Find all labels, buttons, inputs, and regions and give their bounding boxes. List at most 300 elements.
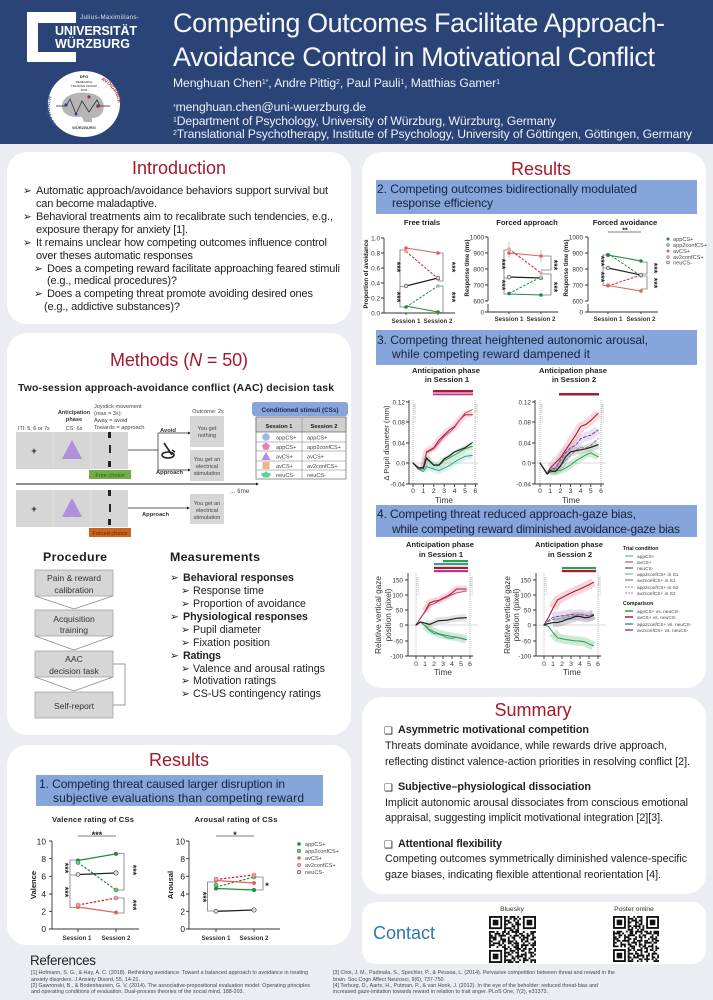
chart: free trials: *** xyxy=(392,262,402,273)
chart: valence rating: *** xyxy=(92,830,103,840)
panel: results left xyxy=(7,745,351,945)
chart: forced avoidance: 900 xyxy=(572,250,583,258)
chart: forced approach xyxy=(465,218,559,323)
introduction bullet list: (e.g., addictive substances)? xyxy=(44,301,180,313)
chart: pupil session 2: CS offset xyxy=(600,403,605,422)
authors: 1* xyxy=(262,79,269,86)
chart: free trials: Proportion of avoidance xyxy=(364,239,370,309)
introduction bullet list: ➢ xyxy=(34,288,43,300)
task timeline diagram: phase xyxy=(66,417,82,423)
task title: Two-session approach-avoidance conflict (AAC) decision task xyxy=(18,383,334,394)
chart: gaze session 2: Time xyxy=(563,668,581,677)
panel: summary xyxy=(362,697,706,894)
finding 2 banner xyxy=(376,180,697,214)
task timeline diagram: stimulation xyxy=(194,515,220,521)
legend: ratings: app2confCS+ xyxy=(305,849,339,855)
chart: gaze session 1: 0 xyxy=(414,661,418,668)
chart: arousal rating: 6 xyxy=(180,872,185,882)
chart: pupil session 1: 1 xyxy=(422,488,426,495)
chart: forced avoidance: Response time (ms) xyxy=(564,239,570,297)
authors: , Andre Pittig xyxy=(268,76,336,90)
chart: gaze session 1: 5 xyxy=(459,661,463,668)
introduction bullet list: Does a competing threat promote avoiding desired ones xyxy=(47,288,314,300)
legend: gaze trial condition and comparison: app2confCS+ in S2 xyxy=(637,585,679,591)
chart: forced avoidance xyxy=(564,218,659,323)
chart: gaze session 1: 1 xyxy=(423,661,427,668)
logo: Universität Würzburg: UNIVERSITÄT xyxy=(55,23,137,38)
references: [2] Gawronski, B., & Bodenhausen, G. V. (2014). The associative-propositional evaluation model: Operating principles xyxy=(31,983,310,989)
chart: free trials: 0.0 xyxy=(371,310,380,318)
chart: forced approach: *** xyxy=(549,260,559,271)
chart: gaze session 2: 150 xyxy=(520,578,531,584)
summary: asymmetric motivational competition: ❑ xyxy=(384,726,393,737)
chart: free trials: Session 2 xyxy=(424,318,453,325)
logo: DFG research training group: 2644 xyxy=(81,88,88,92)
QR code: Bluesky: Bluesky xyxy=(500,906,524,913)
chart: pupil session 2: 0 xyxy=(538,488,542,495)
legend: gaze trial condition and comparison xyxy=(623,546,692,634)
authors: , Matthias Gamer xyxy=(404,76,496,90)
measurements list: ➢ xyxy=(170,572,179,584)
task timeline diagram: stimulation xyxy=(194,471,220,477)
chart: gaze session 1: in Session 1 xyxy=(419,550,464,559)
finding 3 banner: while competing reward dampened it xyxy=(391,347,591,361)
chart: gaze session 2: 2 xyxy=(560,661,564,668)
chart: gaze session 1: 3 xyxy=(441,661,445,668)
affiliations: menghuan.chen@uni-wuerzburg.de xyxy=(176,100,366,114)
logo: DFG research training group: APPROACH xyxy=(46,96,56,125)
chart: valence rating: 4 xyxy=(41,889,46,899)
chart: gaze session 1: CS onset xyxy=(415,576,420,595)
affiliations: Translational Psychotherapy, Institute of Psychology, University of Göttingen, Göttingen, Germany xyxy=(177,127,693,141)
chart: valence rating: 2 xyxy=(41,906,46,916)
procedure flow: Self-report xyxy=(54,701,95,711)
chart: pupil session 1: CS offset xyxy=(474,403,479,422)
chart: arousal rating xyxy=(166,815,280,942)
chart: pupil session 2: Time xyxy=(562,496,580,505)
measurements list: ➢ xyxy=(181,637,190,649)
chart: pupil session 1: in Session 1 xyxy=(425,375,470,384)
legend: gaze trial condition and comparison: neuCS- xyxy=(637,566,654,572)
references: References xyxy=(30,953,96,968)
task timeline diagram: ITI: 5, 6 or 7s xyxy=(18,426,50,432)
heading: results: Results xyxy=(511,159,571,179)
chart: pupil session 2: 3 xyxy=(569,488,573,495)
chart: pupil session 2: 2 xyxy=(559,488,563,495)
chart: forced approach: *** xyxy=(497,259,507,270)
logo: DFG research training group: AVOIDANCE xyxy=(101,78,122,103)
introduction bullet list: over theses automatic responses xyxy=(36,250,194,262)
legend: gaze trial condition and comparison: Comparison xyxy=(623,601,653,607)
measurements list: ➢ xyxy=(181,688,190,700)
title: Competing Outcomes Facilitate Approach- xyxy=(173,8,665,38)
chart: forced approach: 1000 xyxy=(470,234,484,242)
chart: gaze session 2: 3 xyxy=(569,661,573,668)
title xyxy=(173,8,665,72)
summary: subjective-physiological dissociation xyxy=(384,781,688,824)
task timeline diagram: You get xyxy=(198,426,217,432)
chart: free trials: 1.0 xyxy=(371,236,380,242)
legend: gaze trial condition and comparison: appCS+ xyxy=(637,554,655,560)
introduction bullet list: Behavioral treatments aim to recalibrate such tendencies, e.g., xyxy=(36,211,333,223)
title: Avoidance Control in Motivational Conflict xyxy=(173,42,655,72)
summary: attentional flexibility: gaze biases, indicating flexible attentional reorientation [4]. xyxy=(385,869,661,881)
task timeline diagram: electrical xyxy=(196,464,218,470)
chart: gaze session 2 xyxy=(503,540,606,677)
finding 1 banner: subjective evaluations than competing reward xyxy=(53,791,304,805)
conditioned stimuli table: avCS+ xyxy=(276,464,293,470)
affiliations xyxy=(173,100,693,141)
summary: attentional flexibility: Competing outcomes symmetrically diminished valence-specific xyxy=(385,853,688,865)
introduction bullet list: (e.g., medical procedures)? xyxy=(47,275,177,287)
task timeline diagram: CS: 6s xyxy=(66,426,83,432)
chart: forced avoidance: *** xyxy=(596,256,606,267)
chart: valence rating: *** xyxy=(60,887,70,898)
chart: forced avoidance: Session 2 xyxy=(627,316,656,323)
chart: pupil session 1: 0 xyxy=(411,488,415,495)
measurements list: ➢ xyxy=(181,585,190,597)
chart: valence rating: *** xyxy=(60,863,70,874)
legend: ratings: avCS+ xyxy=(305,856,322,862)
logo: DFG research training group: WÜRZBURG xyxy=(72,125,96,130)
measurements list: ➢ xyxy=(181,598,190,610)
legend: ratings xyxy=(297,842,339,876)
panel: introduction xyxy=(7,152,351,324)
chart: gaze session 2: Anticipation phase xyxy=(535,540,603,549)
chart: arousal rating: Arousal xyxy=(166,871,175,899)
logo: DFG research training group: DFG xyxy=(80,74,88,79)
chart: free trials: 0.4 xyxy=(371,280,380,288)
chart: gaze session 2: -100 xyxy=(518,654,531,660)
legend: ratings: appCS+ xyxy=(305,842,325,848)
finding 1 banner: 1. Competing threat caused larger disruption in xyxy=(39,777,285,791)
chart: pupil session 1: 3 xyxy=(442,488,446,495)
task timeline diagram: (max = 3s): xyxy=(94,411,123,417)
task timeline diagram: Joystick movement xyxy=(94,404,142,410)
task timeline diagram: You get an xyxy=(194,457,220,463)
legend: ratings: neuCS- xyxy=(305,870,324,876)
task timeline diagram xyxy=(16,404,259,537)
task timeline diagram: Towards = approach xyxy=(94,425,145,431)
chart: arousal rating: 4 xyxy=(180,889,185,899)
introduction bullet list: exposure therapy for anxiety [1]. xyxy=(36,224,188,236)
task timeline diagram: Approach xyxy=(156,470,184,476)
measurements list: ➢ xyxy=(170,611,179,623)
chart: gaze session 1: CS offset xyxy=(469,576,474,595)
chart: pupil session 1: CS onset xyxy=(412,403,417,422)
chart: pupil session 1: 0.08 xyxy=(393,420,405,426)
chart: arousal rating: *** xyxy=(198,892,208,903)
chart: gaze session 1: Time xyxy=(434,668,452,677)
measurements list xyxy=(170,572,325,700)
QR code: poster online xyxy=(613,906,659,961)
chart: forced approach: Response time (ms) xyxy=(465,239,471,297)
references: [3] Choi, J. M., Padmala, S., Spechler, P., & Pessoa, L. (2014). Pervasive competition between threat and reward in the xyxy=(333,970,615,976)
chart: pupil session 1: 5 xyxy=(463,488,467,495)
chart: pupil session 1: 2 xyxy=(432,488,436,495)
conditioned stimuli table: appCS+ xyxy=(276,436,296,442)
affiliations: Department of Psychology, University of Würzburg, Würzburg, Germany xyxy=(177,114,557,128)
finding 3 banner xyxy=(376,330,697,365)
references: [1] Hofmann, S. G., & Hay, A. C. (2018). Rethinking avoidance: Toward a balanced approach to avoidance in treating xyxy=(31,970,308,976)
summary: subjective-physiological dissociation: ❑ xyxy=(384,783,393,794)
task timeline diagram: ... time xyxy=(230,488,250,495)
chart: valence rating: 6 xyxy=(41,872,46,882)
procedure flow: Acquisition xyxy=(53,614,95,624)
chart: valence rating: *** xyxy=(128,865,138,876)
affiliations: * xyxy=(173,104,176,111)
heading: summary: Summary xyxy=(494,700,572,720)
finding 2 banner: response efficiency xyxy=(392,196,493,210)
finding 4 banner: while competing reward diminished avoidance-gaze bias xyxy=(391,522,680,536)
introduction bullet list: Does a competing reward facilitate approaching feared stimuli xyxy=(47,263,340,275)
task timeline diagram: Avoid xyxy=(160,428,176,434)
chart: valence rating: 8 xyxy=(41,854,46,864)
introduction bullet list xyxy=(23,185,340,313)
chart: gaze session 1: 50 xyxy=(396,608,403,614)
measurements list: Valence and arousal ratings xyxy=(193,663,325,675)
summary: asymmetric motivational competition: reflecting distinct valence-action priorities in resolving conflict [2]. xyxy=(385,756,690,768)
chart: arousal rating: * xyxy=(233,830,237,840)
chart: forced approach: 600 xyxy=(473,298,484,306)
chart: pupil session 1: 0.04 xyxy=(393,440,405,448)
chart: pupil session 1: Time xyxy=(435,496,453,505)
chart: pupil session 2: Anticipation phase xyxy=(539,366,607,375)
legend: response efficiency: avCS+ xyxy=(673,249,690,255)
chart: gaze session 2: 5 xyxy=(587,661,591,668)
chart: free trials xyxy=(364,218,457,325)
chart: gaze session 2: 1 xyxy=(551,661,555,668)
chart: gaze session 1: Relative vertical gaze xyxy=(374,576,383,654)
summary: subjective-physiological dissociation: Subjective–physiological dissociation xyxy=(398,781,591,793)
legend: gaze trial condition and comparison: av2confCS+ in S2 xyxy=(637,591,676,597)
chart: free trials: *** xyxy=(447,262,457,273)
finding 2 banner: 2. Competing outcomes bidirectionally modulated xyxy=(377,182,637,196)
chart: forced approach: Forced approach xyxy=(496,218,558,227)
label: free choice xyxy=(89,470,131,479)
task timeline diagram: + xyxy=(31,504,37,514)
chart: forced approach: *** xyxy=(549,282,559,293)
procedure flow: AAC xyxy=(65,654,83,664)
chart: gaze session 2: 0 xyxy=(542,661,546,668)
chart: arousal rating: 8 xyxy=(180,854,185,864)
summary: asymmetric motivational competition: Threats dominate avoidance, while rewards drive approach, xyxy=(385,740,667,752)
chart: pupil session 1 xyxy=(382,366,480,505)
references: brain. Soc Cogn Affect Neurosci, 9(6), 737-750. xyxy=(333,977,445,983)
chart: valence rating: Session 2 xyxy=(102,935,131,942)
chart: free trials: 0.8 xyxy=(371,250,380,258)
references: [4] Terburg, D., Aarts, H., Putman, P., & van Honk, J. (2012). In the eye of the beholder: reduced threat-bias and xyxy=(333,983,598,989)
summary: attentional flexibility: ❑ xyxy=(384,840,393,851)
chart: valence rating: Valence rating of CSs xyxy=(52,815,134,824)
chart: valence rating xyxy=(29,815,139,942)
logo: DFG research training group: RESEARCH xyxy=(76,80,92,84)
measurements list: ➢ xyxy=(181,624,190,636)
procedure flow: decision task xyxy=(49,666,100,676)
QR code: poster online: Poster online xyxy=(614,906,654,913)
references: increased gaze-imitation towards reward in relation to trait anger. PLoS One, 7(2), e31373. xyxy=(333,989,548,995)
authors: , Paul Pauli xyxy=(340,76,400,90)
chart: forced avoidance: *** xyxy=(596,272,606,283)
heading: measurements: Measurements xyxy=(170,550,260,564)
label: forced choice: Forced choice xyxy=(92,531,128,537)
chart: forced avoidance: ** xyxy=(622,228,628,234)
chart: forced approach: Session 2 xyxy=(527,316,556,323)
task timeline diagram: Anticipation xyxy=(58,410,91,416)
legend: gaze trial condition and comparison: app2confCS+ in S1 xyxy=(637,572,679,578)
chart: free trials: 0.6 xyxy=(371,266,380,272)
conditioned stimuli table: neuCS- xyxy=(307,473,326,479)
chart: pupil session 1: 0.0 xyxy=(396,460,405,468)
chart: gaze session 2: 0 xyxy=(527,622,531,630)
chart: valence rating: Valence xyxy=(29,871,38,899)
chart: gaze session 1: -50 xyxy=(394,638,403,646)
conditioned stimuli table: appCS+ xyxy=(276,445,296,451)
chart: pupil session 2: 0.04 xyxy=(519,440,531,448)
measurements list: Fixation position xyxy=(193,637,270,649)
legend: ratings: av2confCS+ xyxy=(305,863,336,869)
measurements list: Behavioral responses xyxy=(183,572,294,584)
measurements list: ➢ xyxy=(170,650,179,662)
chart: pupil session 2: 0.08 xyxy=(519,420,531,426)
chart: valence rating: 0 xyxy=(41,924,46,934)
measurements list: Response time xyxy=(193,585,264,597)
chart: arousal rating: Session 1 xyxy=(202,935,231,942)
summary: asymmetric motivational competition xyxy=(384,724,690,768)
conditioned stimuli table: app2confCS+ xyxy=(307,445,341,451)
conditioned stimuli table: av2confCS+ xyxy=(307,464,338,470)
summary: subjective-physiological dissociation: appraisal, suggesting implicit motivational integration [2][3]. xyxy=(385,812,663,824)
chart: gaze session 1: -100 xyxy=(390,654,403,660)
introduction bullet list: Automatic approach/avoidance behaviors support survival but xyxy=(36,185,328,197)
summary: attentional flexibility xyxy=(384,838,688,881)
heading: introduction: Introduction xyxy=(132,158,226,178)
chart: pupil session 1: 4 xyxy=(453,488,457,495)
summary: subjective-physiological dissociation: Implicit autonomic arousal dissociates from conscious emotional xyxy=(385,797,688,809)
chart: arousal rating: Session 2 xyxy=(240,935,269,942)
logo: Universität Würzburg: WÜRZBURG xyxy=(55,36,130,51)
references: and operating conditions of evaluation. Dual-process theories of the social mind, 188-203. xyxy=(31,989,244,995)
logo: Universität Würzburg xyxy=(27,12,139,62)
chart: gaze session 1: position (pixel) xyxy=(384,588,393,641)
chart: gaze session 1: 2 xyxy=(432,661,436,668)
references xyxy=(30,953,615,995)
task timeline diagram: Away = avoid xyxy=(94,418,127,424)
finding 4 banner xyxy=(376,505,697,537)
chart: forced avoidance: 800 xyxy=(572,266,583,274)
task timeline diagram: + xyxy=(31,446,37,456)
chart: gaze session 1: Anticipation phase xyxy=(406,540,474,549)
logo: DFG research training group: TRAINING GROUP xyxy=(71,84,97,88)
chart: forced avoidance: Session 1 xyxy=(594,316,623,323)
measurements list: Motivation ratings xyxy=(193,675,276,687)
chart: gaze session 1 xyxy=(374,540,478,677)
measurements list: CS-US contingency ratings xyxy=(193,688,321,700)
affiliations: 1 xyxy=(173,117,177,124)
affiliations: 2 xyxy=(173,130,177,137)
chart: gaze session 2: 50 xyxy=(524,608,531,614)
summary: asymmetric motivational competition: Asymmetric motivational competition xyxy=(398,724,589,736)
header banner xyxy=(0,0,713,144)
measurements list: Ratings xyxy=(183,650,221,662)
summary: attentional flexibility: Attentional flexibility xyxy=(398,838,502,850)
heading: contact: Contact xyxy=(373,923,435,943)
legend: gaze trial condition and comparison: avCS+ xyxy=(637,560,652,566)
task timeline diagram: Approach xyxy=(142,512,170,518)
authors: Menghuan Chen xyxy=(173,76,262,90)
task timeline diagram: Outcome: 2s xyxy=(192,409,224,415)
chart: forced avoidance: 700 xyxy=(572,282,583,290)
chart: valence rating: 10 xyxy=(37,836,46,846)
legend: gaze trial condition and comparison: av2confCS+ in S1 xyxy=(637,578,676,584)
conditioned stimuli table xyxy=(252,402,348,479)
chart: gaze session 2: Relative vertical gaze xyxy=(503,576,512,654)
conditioned stimuli table: Session 2 xyxy=(310,424,338,430)
chart: gaze session 2: CS onset xyxy=(543,576,548,595)
measurements list: ➢ xyxy=(181,663,190,675)
chart: forced avoidance: *** xyxy=(649,278,659,289)
finding 1 banner xyxy=(36,775,323,806)
chart: pupil session 2: 0.0 xyxy=(522,460,531,468)
chart: gaze session 2: 4 xyxy=(578,661,582,668)
authors: 2 xyxy=(336,79,340,86)
chart: free trials: Session 1 xyxy=(392,318,421,325)
chart: gaze session 1: 4 xyxy=(450,661,454,668)
chart: arousal rating: * xyxy=(265,881,269,891)
chart: forced avoidance: *** xyxy=(649,263,659,274)
conditioned stimuli table: avCS+ xyxy=(307,454,324,460)
chart: pupil session 2: in Session 2 xyxy=(552,375,596,384)
chart: gaze session 2: position (pixel) xyxy=(512,588,521,641)
conditioned stimuli table: avCS+ xyxy=(276,454,293,460)
legend: gaze trial condition and comparison: avCS+ vs. neuCS- xyxy=(637,615,677,621)
panel: methods xyxy=(7,333,351,735)
introduction bullet list: ➢ xyxy=(34,263,43,275)
chart: gaze session 2: in Session 2 xyxy=(548,550,592,559)
chart: pupil session 1: 0.12 xyxy=(393,400,405,406)
finding 3 banner: 3. Competing threat heightened autonomic arousal, xyxy=(377,333,648,347)
legend: gaze trial condition and comparison: app2confCS+ vs. neuCS- xyxy=(637,622,692,628)
legend: response efficiency: av2confCS+ xyxy=(673,255,704,261)
introduction bullet list: ➢ xyxy=(23,185,32,197)
heading: procedure: Procedure xyxy=(43,550,107,564)
chart: forced approach: Session 1 xyxy=(495,316,524,323)
introduction bullet list: ➢ xyxy=(23,211,32,223)
chart: valence rating: Session 1 xyxy=(63,935,92,942)
authors: 1 xyxy=(496,79,500,86)
legend: response efficiency: app2confCS+ xyxy=(673,243,707,249)
chart: gaze session 2: -50 xyxy=(522,638,531,646)
measurements list: Pupil diameter xyxy=(193,624,261,636)
task timeline diagram: nothing xyxy=(198,433,216,439)
legend: response efficiency: appCS+ xyxy=(673,237,693,243)
chart: forced avoidance: 600 xyxy=(572,298,583,306)
legend: gaze trial condition and comparison: av2confCS+ vs. neuCS- xyxy=(637,628,689,634)
heading: methods: Methods (N = 50) xyxy=(110,350,248,370)
chart: forced avoidance: 1000 xyxy=(569,234,583,242)
label: free choice: Free choice xyxy=(95,473,125,479)
chart: pupil session 2: 1 xyxy=(548,488,552,495)
label: forced choice xyxy=(89,528,131,537)
chart: free trials: 0.2 xyxy=(371,296,380,302)
conditioned stimuli table: neuCS- xyxy=(276,473,295,479)
conditioned stimuli table: appCS+ xyxy=(307,436,327,442)
chart: arousal rating: Arousal rating of CSs xyxy=(194,815,278,824)
chart: free trials: *** xyxy=(392,292,402,303)
chart: forced approach: *** xyxy=(497,280,507,291)
chart: arousal rating: 0 xyxy=(180,924,185,934)
chart: pupil session 2: -0.04 xyxy=(516,482,531,488)
